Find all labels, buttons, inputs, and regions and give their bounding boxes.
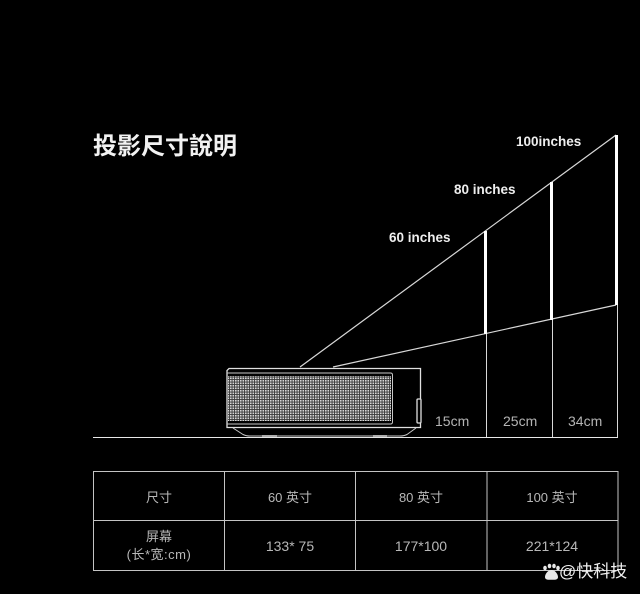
ground line bbox=[93, 436, 618, 438]
icon: projector bbox=[227, 368, 421, 436]
watermark text: @快科技 bbox=[559, 562, 627, 581]
projector grille bbox=[228, 376, 391, 421]
row label: unit: (长*宽:cm) bbox=[127, 547, 191, 562]
icon: paw bbox=[543, 564, 560, 580]
table grid bbox=[93, 471, 618, 570]
distance tick: 80 inches bbox=[552, 320, 554, 437]
projector body bbox=[227, 368, 420, 428]
header: 80: 80 英寸 bbox=[399, 490, 443, 505]
distance label: 34cm: 34cm bbox=[568, 413, 602, 429]
upper projection line bbox=[300, 135, 616, 367]
side port bbox=[417, 399, 421, 423]
right foot bbox=[373, 435, 387, 437]
left foot bbox=[262, 435, 277, 437]
grille frame bbox=[227, 373, 392, 424]
distance tick: 100 inches bbox=[616, 305, 618, 437]
projector base bbox=[233, 428, 416, 436]
header: 100: 100 英寸 bbox=[526, 490, 578, 505]
header: 60: 60 英寸 bbox=[268, 490, 312, 505]
label: 100 inches: 100inches bbox=[516, 134, 581, 149]
distance tick: 60 inches bbox=[486, 334, 488, 437]
header: size: 尺寸 bbox=[146, 490, 172, 505]
screen bar: 100 inches bbox=[615, 135, 618, 305]
value: 80: 177*100 bbox=[395, 538, 447, 554]
screen bar: 60 inches bbox=[484, 231, 487, 334]
projection diagram bbox=[93, 134, 618, 438]
distance label: 15cm: 15cm bbox=[435, 413, 469, 429]
watermark bbox=[543, 562, 627, 581]
screen bar: 80 inches bbox=[550, 182, 553, 320]
row label: screen: 屏幕 bbox=[146, 529, 172, 544]
value: 60: 133* 75 bbox=[266, 538, 314, 554]
label: 60 inches: 60 inches bbox=[389, 230, 451, 245]
size table bbox=[93, 471, 618, 570]
lower projection line bbox=[333, 305, 616, 367]
title: 投影尺寸說明 bbox=[93, 133, 237, 160]
distance label: 25cm: 25cm bbox=[503, 413, 537, 429]
label: 80 inches: 80 inches bbox=[454, 182, 516, 197]
value: 100: 221*124 bbox=[526, 538, 578, 554]
